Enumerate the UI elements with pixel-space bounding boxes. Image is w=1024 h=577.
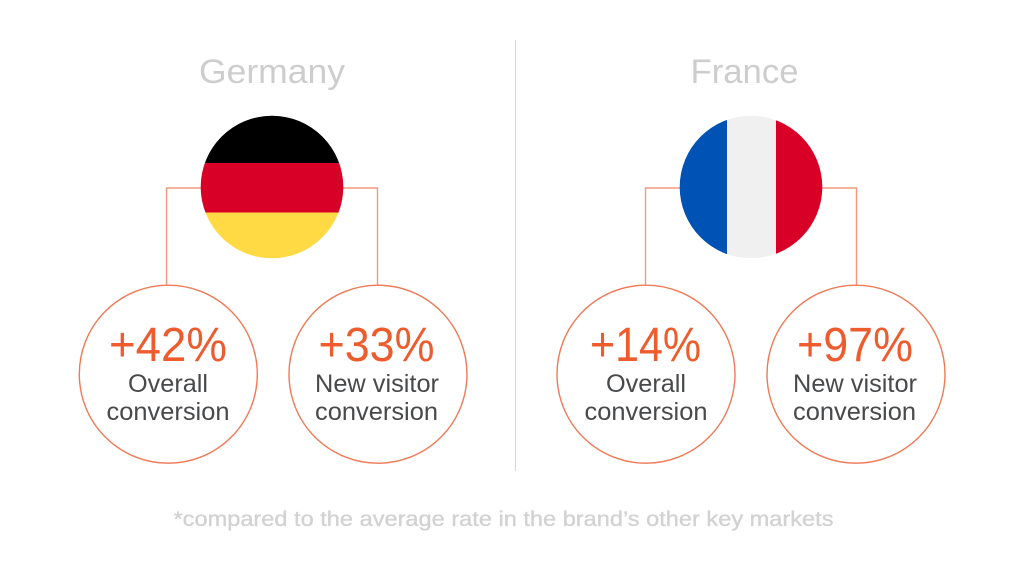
stat: new visitor conversion France — [767, 285, 945, 463]
panel: France — [557, 53, 945, 463]
divider — [515, 40, 516, 471]
connector lines: France — [646, 188, 856, 286]
stat: overall conversion Germany — [79, 285, 257, 463]
icon: French flag — [679, 115, 824, 259]
stat: new visitor conversion Germany — [289, 285, 467, 463]
stat: new visitor conversion France: conversion — [793, 398, 916, 426]
stat: new visitor conversion France: +97% — [797, 319, 913, 372]
stat: overall conversion France: +14% — [590, 319, 701, 372]
heading: Germany: Germany — [199, 53, 345, 91]
connector lines: Germany — [166, 188, 378, 286]
heading: France: France — [690, 53, 798, 91]
stat: overall conversion Germany: Overall — [128, 370, 208, 398]
stat: new visitor conversion Germany: conversion — [315, 398, 438, 426]
stat: overall conversion France: Overall — [606, 370, 686, 398]
stat: overall conversion France — [557, 285, 735, 463]
stat: new visitor conversion Germany: +33% — [318, 319, 434, 372]
stat: overall conversion France: conversion — [584, 398, 708, 426]
icon: German flag — [200, 115, 344, 260]
stat: overall conversion Germany: +42% — [109, 319, 227, 372]
stat: new visitor conversion Germany: New visitor — [315, 370, 439, 398]
stat: new visitor conversion France: New visitor — [793, 370, 917, 398]
panel: Germany — [79, 53, 467, 463]
footnote: *compared to the average rate in the brand’s other key markets — [174, 508, 834, 531]
stat: overall conversion Germany: conversion — [106, 398, 230, 426]
